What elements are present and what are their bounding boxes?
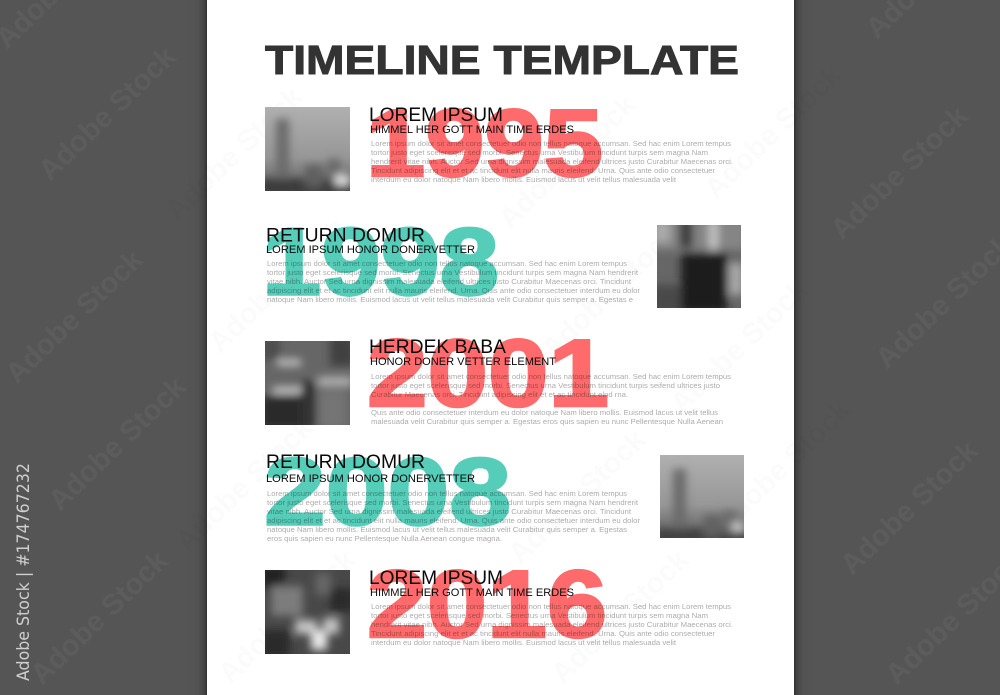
body text: tortor justo eget scelerisque sed morbi. Senectus urna Vestibulum tincidunt turpis seifend ultrices justo (371, 381, 720, 390)
timeline entry: 1998 (262, 208, 746, 316)
body text: Tincidunt adipiscing elit et et ac tincidunt elit nulla mauris eleifend. Urna. Quis ante odio consectetuer (371, 629, 715, 638)
body text: tortor justo eget scelerisque sed morbi. Senectus urna Vestibulum tincidunt turpis sem magna Nam hendrerit (267, 268, 639, 277)
body text: Lorem ipsum dolor sit amet consectetuer odio non tellus natoque accumsan. Sed hac enim Lorem tempus (267, 489, 627, 498)
body text (371, 372, 731, 426)
photo: dark building (657, 225, 741, 308)
watermarks on white page: Adobe Stock (160, 80, 310, 227)
body text: vitae nibh. Auctor Sed urna dignissim malesuada eleifend ultrices justo Curabitur Maecenas orci. Tincidunt (267, 277, 632, 286)
heading: LOREM IPSUM (369, 567, 503, 589)
watermarks on white page: Adobe Stock (708, 393, 858, 540)
watermarks on white page: Adobe Stock (665, 273, 815, 420)
subheading: HIMMEL HER GOTT MAIN TIME ERDES (370, 587, 574, 599)
watermarks on white page: Adobe Stock (170, 411, 320, 558)
body text (267, 259, 640, 304)
body text: Tincidunt adipiscing elit et et ac tincidunt elit nulla mauris eleifend. Urna. Quis ante odio consectetuer (371, 166, 715, 175)
watermarks on dark background: Adobe Stock (25, 544, 175, 691)
watermarks on dark background: Adobe Stock (825, 99, 975, 246)
subheading: LOREM IPSUM HONOR DONERVETTER (266, 244, 475, 256)
watermarks on white page (160, 58, 858, 690)
timeline entry: 2008 (264, 438, 749, 546)
page shadow: right (794, 0, 814, 695)
watermarks on dark background: Adobe Stock (33, 40, 183, 187)
watermarks on dark background: Adobe Stock (43, 370, 193, 517)
body text: Lorem ipsum dolor sit amet consectetuer odio non tellus natoque accumsan. Sed hac enim Lorem tempus (371, 372, 731, 381)
body text: Lorem ipsum dolor sit amet consectetuer odio non tellus natoque accumsan. Sed hac enim Lorem tempus (371, 602, 731, 611)
body text: eros quis sapien eu nunc Pellentesque Nulla Aenean congue magna. (267, 534, 502, 543)
body text: Curabitur Maecenas orci. Tincidunt adipiscing elit et et ac tincidunt elnd rna. (371, 390, 628, 399)
timeline entry: 1995 (260, 90, 733, 197)
timeline entry: 2001 (260, 320, 731, 430)
body text (371, 139, 733, 184)
body text: natoque Nam libero mollis. Euismod lacus ut velit tellus malesuada velit Curabitur quis semper a. Egestas e (267, 295, 633, 304)
body text: Quis ante odio consectetuer interdum eu dolor natoque Nam libero mollis. Euismod lacus ut velit tellus (371, 408, 718, 417)
stock id caption: Adobe Stock | #174767232 (14, 463, 34, 681)
title: TIMELINE TEMPLATE (265, 37, 739, 83)
heading: LOREM IPSUM (369, 104, 503, 126)
body text: hendrerit vitae nibh. Auctor Sed urna dignissim malesuada eleifend ultrices justo Curabitur Maecenas orci. (371, 620, 733, 629)
white page (207, 0, 794, 695)
heading: RETURN DOMUR (266, 451, 425, 473)
photo: city skyline (265, 107, 350, 191)
photo: foggy tower (660, 455, 744, 538)
watermarks on white page: Adobe Stock (536, 218, 686, 365)
timeline entry: 2016 (260, 551, 733, 659)
body text: tortor justo eget scelerisque sed morbi. Senectus urna Vestibulum tincidunt turpis sem magna Nam hendrerit (267, 498, 639, 507)
year 2016: 2016 (367, 551, 607, 658)
subheading: HIMMEL HER GOTT MAIN TIME ERDES (370, 124, 574, 136)
body text: adipiscing elit et et ac tincidunt elit nulla mauris eleifend. Urna. Quis ante odio consectetuer interdum eu dolor (267, 286, 640, 295)
watermarks on white page: Adobe Stock (213, 543, 363, 690)
heading: RETURN DOMUR (266, 224, 425, 246)
body text: tortor justo eget scelerisque sed morbi. Senectus urna Vestibulum tincidunt turpis sem magna Nam (371, 611, 708, 620)
subheading: LOREM IPSUM HONOR DONERVETTER (266, 473, 475, 485)
watermarks on dark background: Adobe Stock (0, 243, 150, 390)
body text: natoque Nam libero mollis. Euismod lacus ut velit tellus malesuada velit Curabitur quis semper a. Egestas (267, 525, 627, 534)
body text (371, 602, 733, 647)
subheading: HONOR DONER VETTER ELEMENT (370, 356, 556, 368)
watermarks on white page: Adobe Stock (699, 58, 849, 205)
photo: abstract dark (265, 570, 350, 654)
body text: Lorem ipsum dolor sit amet consectetuer odio non tellus natoque accumsan. Sed hac enim Lorem tempus (371, 139, 731, 148)
body text: vitae nibh. Auctor Sed urna dignissim malesuada eleifend ultrices justo Curabitur Maecenas orci. Tincidunt (267, 507, 632, 516)
body text (267, 489, 640, 543)
watermarks on white page: Adobe Stock (503, 423, 653, 570)
body text: interdum eu dolor natoque Nam libero mollis. Euismod lacus ut velit tellus malesuada velit (371, 175, 677, 184)
body text: interdum eu dolor natoque Nam libero mollis. Euismod lacus ut velit tellus malesuada velit (371, 638, 677, 647)
watermarks on white page: Adobe Stock (203, 212, 353, 359)
year 1995: 1995 (366, 90, 603, 197)
photo: buildings (265, 341, 350, 425)
year 2008: 2008 (264, 438, 511, 546)
body text: hendrerit vitae nibh. Auctor Sed urna dignissim malesuada eleifend ultrices justo Curabitur Maecenas orci. (371, 157, 733, 166)
body text: tortor justo eget scelerisque sed morbi. Senectus urna Vestibulum tincidunt turpis sem magna Nam (371, 148, 708, 157)
watermarks on white page: Adobe Stock (546, 543, 696, 690)
body text: malesuada velit Curabitur quis semper a. Egestas eros quis sapien eu nunc Pellentesque Nulla Aenean (371, 417, 723, 426)
watermarks on white page: Adobe Stock (493, 88, 643, 235)
body text: adipiscing elit et et ac tincidunt elit nulla mauris eleifend. Urna. Quis ante odio consectetuer interdum eu dolor (267, 516, 640, 525)
page shadow: left (187, 0, 207, 695)
year 1998: 1998 (262, 208, 499, 316)
body text: Lorem ipsum dolor sit amet consectetuer odio non tellus natoque accumsan. Sed hac enim Lorem tempus (267, 259, 627, 268)
year 2001: 2001 (367, 320, 609, 427)
watermarks on dark background: Adobe Stock (835, 434, 985, 581)
heading: HERDEK BABA (369, 336, 506, 358)
